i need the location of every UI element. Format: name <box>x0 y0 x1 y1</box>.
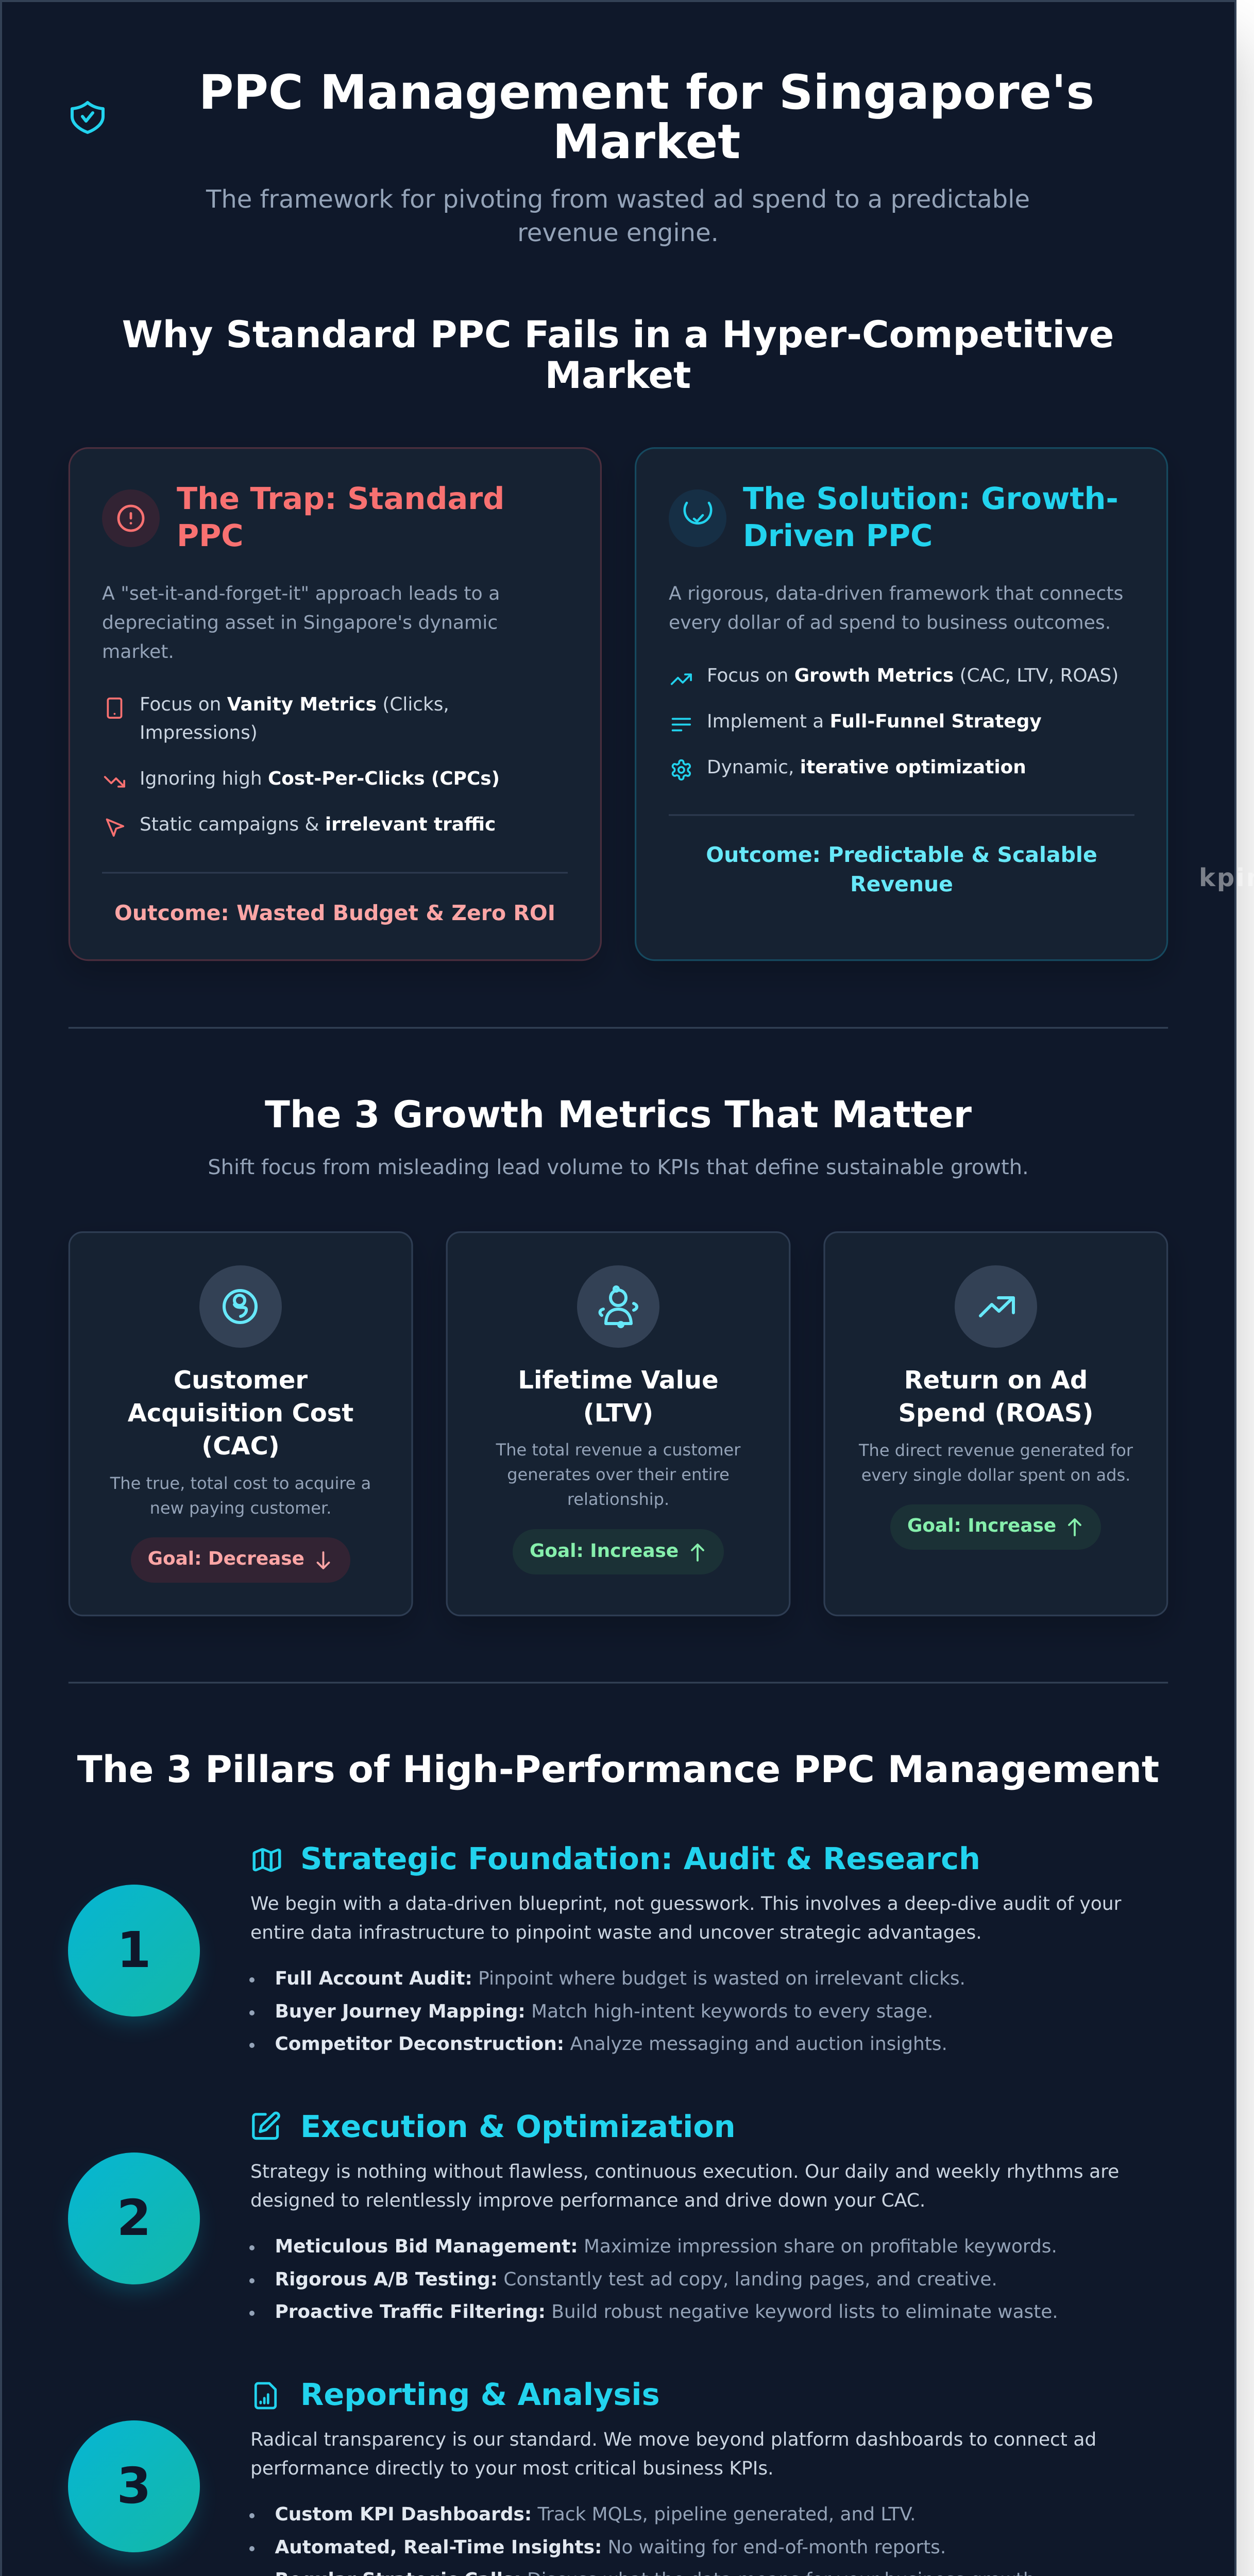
CAC description: The true, total cost to acquire a <box>110 1473 371 1493</box>
CAC title: Acquisition Cost <box>128 1399 353 1428</box>
LTV title: (LTV) <box>583 1399 653 1428</box>
icon: report file <box>256 2383 276 2408</box>
heading: why standard PPC fails: Market <box>545 353 691 397</box>
trap outcome: Outcome: Wasted Budget & Zero ROI <box>114 901 555 925</box>
CAC title <box>128 1366 353 1461</box>
pillar 1 heading: Strategic Foundation: Audit & Research <box>300 1841 980 1876</box>
solution description: every dollar of ad spend to business outcomes. <box>669 611 1111 634</box>
heading: pillars: The 3 Pillars of High-Performance PPC Management <box>77 1748 1159 1791</box>
subtitle: The framework for pivoting from wasted ad spend to a predictable <box>206 185 1030 214</box>
panel: the solution <box>636 448 1167 960</box>
pillar 2 bullets: Meticulous Bid Management: Maximize impression share on profitable keywords. <box>275 2236 1057 2257</box>
LTV title: Lifetime Value <box>518 1366 719 1395</box>
pillar 3 bullets <box>249 2504 1041 2576</box>
number badge 3 <box>68 2420 200 2557</box>
CAC description: new paying customer. <box>150 1498 331 1518</box>
trap item: vanity metrics: Impressions) <box>140 722 258 743</box>
growth metrics subtitle: Shift focus from misleading lead volume to KPIs that define sustainable growth. <box>208 1156 1029 1179</box>
trap description <box>102 582 500 663</box>
solution item: iterative optimization: Dynamic, iterative optimization <box>707 757 1026 778</box>
CAC title: Customer <box>174 1366 308 1395</box>
icon: map <box>254 1850 280 1871</box>
pillar 1 text: entire data infrastructure to pinpoint waste and uncover strategic advantages. <box>250 1922 982 1943</box>
icon: partial check circle <box>669 489 726 547</box>
CAC description <box>110 1473 371 1518</box>
header <box>72 64 1094 247</box>
pillar 3 bullets: Automated, Real-Time Insights: No waiting for end-of-month reports. <box>275 2537 946 2558</box>
pillar 1 bullets <box>249 1968 965 2055</box>
trap description: market. <box>102 640 174 663</box>
pillar 1 <box>68 1841 1122 2055</box>
number badge 2 <box>68 2153 200 2290</box>
solution outcome <box>706 842 1097 896</box>
LTV description: relationship. <box>567 1489 669 1509</box>
ROAS description <box>858 1440 1133 1485</box>
icon: square pen <box>253 2113 279 2139</box>
number badge 3: 3 <box>117 2457 151 2515</box>
heading: why standard PPC fails <box>122 313 1114 397</box>
trap description: depreciating asset in Singapore's dynamic <box>102 611 498 634</box>
panel: CAC metric <box>69 1232 412 1616</box>
CAC goal pill <box>131 1537 350 1583</box>
title: PPC Management for Singapore's <box>199 64 1094 120</box>
icon: shield check <box>72 103 103 132</box>
LTV title <box>518 1366 719 1428</box>
pillar 1 bullets: Competitor Deconstruction: Analyze messaging and auction insights. <box>275 2033 947 2055</box>
pillar 3 text: Radical transparency is our standard. We move beyond platform dashboards to connect ad <box>250 2429 1096 2450</box>
ROAS title: Spend (ROAS) <box>899 1399 1093 1428</box>
CAC title: (CAC) <box>201 1432 280 1461</box>
pillar 2 text: designed to relentlessly improve performance and drive down your CAC. <box>250 2190 925 2211</box>
heading: why standard PPC fails: Why Standard PPC Fails in a Hyper-Competitive <box>122 313 1114 356</box>
ROAS goal pill: Goal: Increase <box>907 1515 1056 1536</box>
pillar 1 bullets: Full Account Audit: Pinpoint where budget is wasted on irrelevant clicks. <box>275 1968 965 1989</box>
pillar 1 text: We begin with a data-driven blueprint, not guesswork. This involves a deep-dive audit of your <box>250 1893 1122 1914</box>
LTV description <box>496 1440 741 1509</box>
pillar 2 <box>68 2109 1119 2323</box>
ROAS description: The direct revenue generated for <box>858 1440 1133 1460</box>
icon: alert circle <box>102 489 160 547</box>
pillar 3 bullets: Custom KPI Dashboards: Track MQLs, pipeline generated, and LTV. <box>275 2504 916 2525</box>
ROAS description: every single dollar spent on ads. <box>861 1465 1130 1485</box>
solution outcome: Revenue <box>850 872 953 896</box>
pillar 2 text: Strategy is nothing without flawless, continuous execution. Our daily and weekly rhythms are <box>250 2161 1119 2182</box>
solution heading: The Solution: Growth- <box>743 481 1119 516</box>
solution outcome: Outcome: Predictable & Scalable <box>706 842 1097 867</box>
solution heading: Driven PPC <box>743 518 933 553</box>
ROAS title <box>899 1366 1093 1428</box>
pillar 2 bullets: Rigorous A/B Testing: Constantly test ad copy, landing pages, and creative. <box>275 2269 997 2290</box>
trap heading: The Trap: Standard <box>177 481 504 516</box>
subtitle <box>206 185 1030 247</box>
trap item: vanity metrics <box>108 694 449 743</box>
pillar 2 text <box>250 2161 1119 2211</box>
LTV goal pill <box>513 1529 724 1574</box>
pillar 3 text: performance directly to your most critical business KPIs. <box>250 2458 774 2479</box>
pillar 1 bullets: Buyer Journey Mapping: Match high-intent keywords to every stage. <box>275 2001 933 2022</box>
title <box>199 64 1094 170</box>
panel: the trap <box>69 448 601 960</box>
CAC goal pill: Goal: Decrease <box>148 1548 304 1569</box>
pillar 3 text <box>250 2429 1096 2479</box>
solution description: A rigorous, data-driven framework that connects <box>669 582 1123 604</box>
solution item: growth metrics: Focus on Growth Metrics (CAC, LTV, ROAS) <box>707 665 1119 686</box>
LTV description: The total revenue a customer <box>496 1440 741 1460</box>
ROAS title: Return on Ad <box>904 1366 1088 1395</box>
solution description <box>669 582 1123 634</box>
trap heading: PPC <box>177 518 244 553</box>
ROAS goal pill <box>890 1504 1101 1550</box>
pillar 2 heading: Execution & Optimization <box>300 2109 736 2144</box>
pillar 2 bullets <box>249 2236 1058 2323</box>
icon: coin <box>199 1265 282 1348</box>
pillar 3 heading: Reporting & Analysis <box>300 2377 660 2412</box>
panel: LTV metric <box>447 1232 790 1616</box>
trap description: A "set-it-and-forget-it" approach leads to a <box>102 582 500 604</box>
pillar 2 bullets: Proactive Traffic Filtering: Build robust negative keyword lists to eliminate waste. <box>275 2301 1058 2323</box>
icon: trending up <box>955 1265 1037 1348</box>
number badge 2: 2 <box>117 2189 151 2247</box>
number badge 1 <box>68 1885 200 2022</box>
title: Market <box>553 114 740 170</box>
solution item: full funnel: Implement a Full-Funnel Strategy <box>707 711 1042 732</box>
heading: growth metrics: The 3 Growth Metrics That Matter <box>265 1093 972 1136</box>
trap item: irrelevant traffic: Static campaigns & irrelevant traffic <box>140 814 496 835</box>
trap heading <box>177 481 504 553</box>
pillar 1 text <box>250 1893 1122 1943</box>
trap item: vanity metrics: Focus on Vanity Metrics (Clicks, <box>140 694 449 715</box>
panel: ROAS metric <box>824 1232 1167 1616</box>
LTV goal pill: Goal: Increase <box>530 1540 679 1562</box>
number badge 1: 1 <box>117 1921 151 1979</box>
pillar 3 <box>68 2377 1096 2576</box>
subtitle: revenue engine. <box>517 218 719 247</box>
trap item: high CPC: Ignoring high Cost-Per-Clicks (CPCs) <box>140 768 500 789</box>
LTV description: generates over their entire <box>507 1465 730 1484</box>
icon: person <box>577 1265 659 1348</box>
solution heading <box>743 481 1119 553</box>
